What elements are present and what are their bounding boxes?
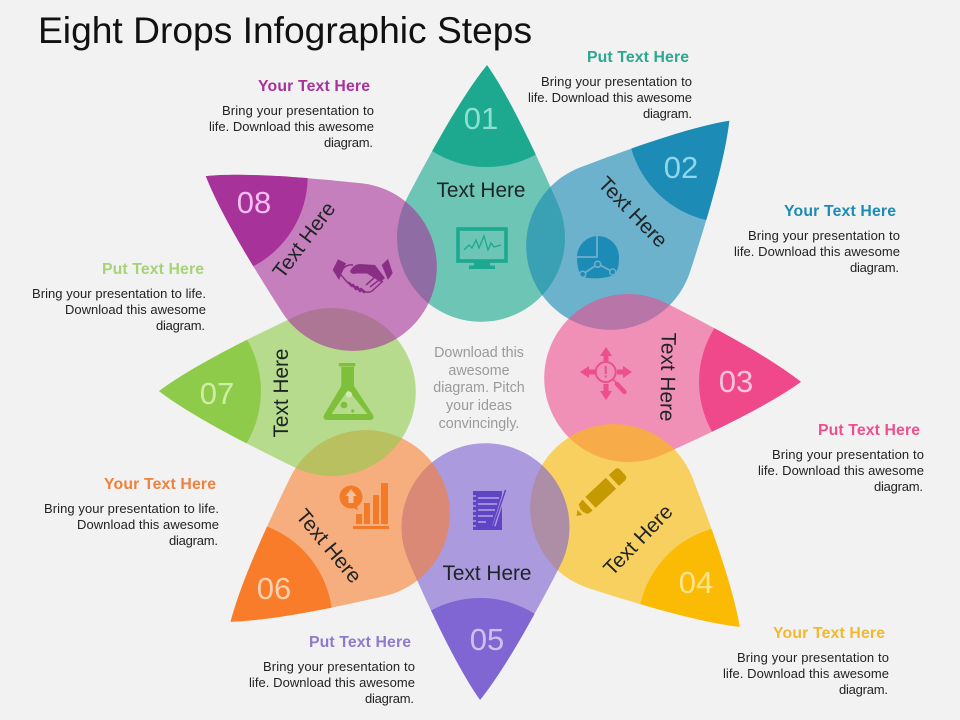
title: Eight Drops Infographic Steps [38, 9, 532, 51]
callout 01: life. Download this awesome [528, 90, 692, 105]
icon: notebook [473, 490, 506, 530]
callout 08: Your Text Here [258, 78, 370, 95]
callout 05: diagram. [365, 691, 414, 706]
callout 06: Your Text Here [104, 476, 216, 493]
callout 06 [44, 476, 219, 548]
callout 02: life. Download this awesome [734, 244, 900, 259]
callout 04: diagram. [839, 682, 888, 697]
petal 01 tip [432, 63, 539, 169]
callout 07 [32, 261, 206, 333]
callout 08 [209, 78, 374, 150]
callout 06: Bring your presentation to life. [44, 501, 219, 516]
petal label 06: Text Here [291, 505, 366, 588]
callout 01: Bring your presentation to [541, 74, 692, 89]
callout 02: Your Text Here [784, 203, 896, 220]
petal 03 body [542, 292, 803, 466]
icon: monitor [458, 229, 506, 269]
center text: convincingly. [439, 416, 519, 432]
petal label 05: Text Here [442, 562, 532, 585]
icon: handshake [333, 259, 393, 292]
petal label 02: Text Here [593, 172, 672, 252]
callout 05: Bring your presentation to [263, 659, 415, 674]
callout 01 [528, 49, 692, 121]
petal 06 tip [198, 518, 343, 662]
petal label 07: Text Here [270, 348, 293, 438]
callout 03 [758, 422, 924, 494]
petal 06 body [178, 396, 484, 687]
petal label 08: Text Here [268, 198, 340, 283]
petal 07 tip [159, 339, 261, 443]
callout 02: diagram. [850, 260, 899, 275]
callout 03: Bring your presentation to [772, 447, 924, 462]
callout 01: diagram. [643, 106, 692, 121]
icon: pie chart with network [577, 236, 619, 278]
number 06: 06 [257, 571, 291, 606]
number 04: 04 [679, 565, 713, 600]
petal 08 body [162, 105, 468, 382]
petal 04 body [495, 389, 797, 688]
number 07: 07 [200, 376, 234, 411]
petal 07 body [159, 307, 416, 476]
callout 03: Put Text Here [818, 422, 920, 439]
petal label 04: Text Here [599, 500, 678, 580]
petal 01 body [394, 62, 571, 325]
callout 08: diagram. [324, 135, 373, 150]
center text: diagram. Pitch [433, 380, 525, 396]
drop 02 [491, 63, 790, 365]
number 05: 05 [470, 622, 504, 657]
petal 05 body [396, 441, 572, 703]
callout 07: Bring your presentation to life. [32, 286, 206, 301]
callout 03: life. Download this awesome [758, 463, 924, 478]
icon: pencil [571, 467, 628, 521]
number 01: 01 [464, 101, 498, 136]
callout 05 [249, 634, 415, 706]
callout 05: life. Download this awesome [249, 675, 415, 690]
callout 01: Put Text Here [587, 49, 689, 66]
petal 05 tip [428, 596, 535, 702]
number 03: 03 [719, 364, 753, 399]
callout 05: Put Text Here [309, 634, 411, 651]
drop 08 [162, 105, 468, 382]
callout 08: Bring your presentation to [222, 103, 374, 118]
drop 04 [495, 389, 797, 688]
center text: awesome [448, 363, 510, 379]
drop 03 [542, 292, 803, 466]
icon: flask [324, 363, 374, 420]
icon: bar chart with speech balloon [340, 483, 389, 529]
center text [433, 345, 525, 432]
callout 07: Put Text Here [102, 261, 204, 278]
drop 05 [396, 441, 572, 703]
callout 08: life. Download this awesome [209, 119, 374, 134]
callout 06: Download this awesome [77, 517, 219, 532]
petal 08 tip [179, 132, 320, 274]
petal label 03: Text Here [655, 332, 680, 422]
callout 07: Download this awesome [65, 302, 206, 317]
callout 04: Bring your presentation to [737, 650, 889, 665]
petal 03 tip [698, 328, 802, 434]
callout 02: Bring your presentation to [748, 228, 900, 243]
center text: Download this [434, 345, 524, 361]
callout 04 [723, 625, 889, 697]
center text: your ideas [446, 398, 512, 414]
drop 07 [159, 307, 416, 476]
petal 02 tip [621, 85, 767, 230]
number 08: 08 [237, 185, 271, 220]
petal 04 tip [630, 519, 775, 665]
callout 06: diagram. [169, 533, 218, 548]
callout 04: Your Text Here [773, 625, 885, 642]
callout 07: diagram. [156, 318, 205, 333]
callout 04: life. Download this awesome [723, 666, 889, 681]
petal label 01: Text Here [436, 179, 526, 202]
callout 02 [734, 203, 900, 275]
petal 02 body [491, 63, 790, 365]
drop 01 [394, 62, 571, 325]
icon: arrows and magnifier [580, 347, 632, 400]
drop 06 [178, 396, 484, 687]
callout 03: diagram. [874, 479, 923, 494]
number 02: 02 [664, 150, 698, 185]
